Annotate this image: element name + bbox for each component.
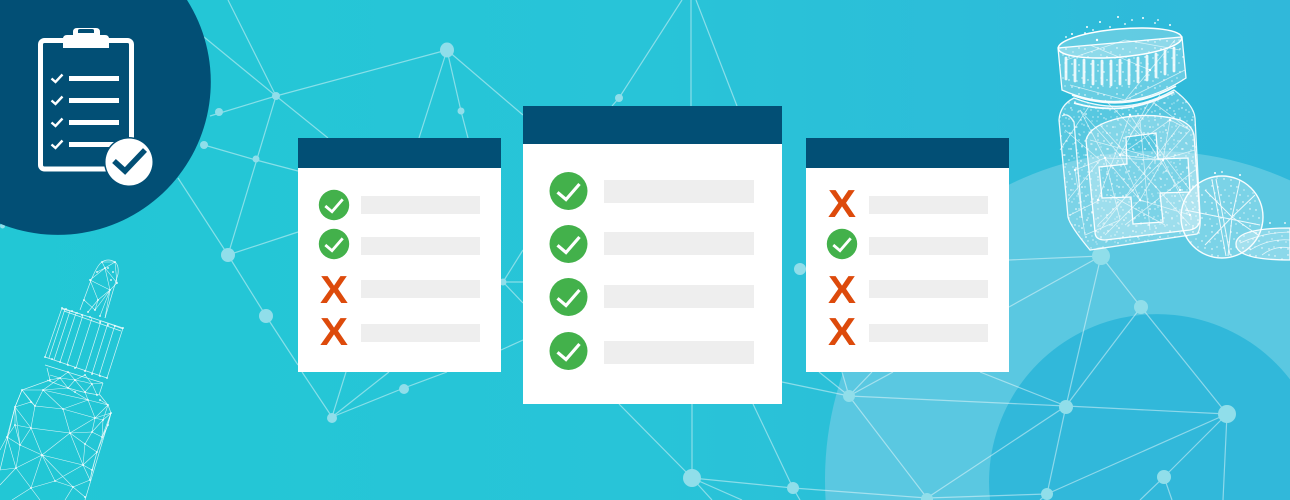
cap ribs bbox=[1066, 48, 1174, 85]
bottle body bbox=[1059, 90, 1200, 250]
sparkle dots above cap bbox=[1065, 16, 1286, 224]
centre panel green checks bbox=[550, 172, 588, 370]
side highlight bbox=[1062, 115, 1082, 218]
clipboard board bbox=[40, 40, 132, 169]
right panel green check bbox=[827, 229, 857, 259]
left panel green checks bbox=[319, 190, 349, 259]
right panel red crosses: X bbox=[828, 311, 856, 354]
check badge bbox=[104, 137, 154, 187]
panel: left checklist bbox=[298, 138, 501, 372]
right panel header bbox=[806, 138, 1009, 168]
panel: right checklist bbox=[806, 138, 1009, 372]
icon: pill bottle wireframe bbox=[1057, 16, 1290, 260]
icon: clipboard checklist bbox=[40, 28, 154, 187]
right panel red crosses bbox=[828, 183, 856, 354]
checklist ticks bbox=[52, 74, 62, 148]
right panel red crosses: X bbox=[828, 183, 856, 226]
cap bbox=[1058, 37, 1186, 102]
dark circle badge bbox=[0, 0, 211, 235]
round pill bbox=[1181, 176, 1263, 258]
left panel placeholder bars bbox=[361, 196, 480, 342]
inner blue circle bbox=[989, 314, 1290, 500]
left panel red crosses: X bbox=[320, 269, 348, 312]
icon: dropper bottle wireframe bbox=[0, 260, 123, 500]
left panel red crosses bbox=[320, 269, 348, 354]
centre panel header bbox=[523, 106, 782, 144]
centre panel placeholder bars bbox=[604, 180, 754, 364]
clipboard clip bbox=[63, 28, 109, 48]
checklist lines bbox=[69, 76, 119, 147]
left panel red crosses: X bbox=[320, 311, 348, 354]
right panel red crosses: X bbox=[828, 269, 856, 312]
bottle label with cross bbox=[1086, 115, 1200, 240]
flat pill bbox=[1236, 228, 1290, 260]
collar bbox=[1072, 86, 1176, 108]
left panel header bbox=[298, 138, 501, 168]
large pale circle bbox=[825, 151, 1290, 500]
panel: centre checklist bbox=[523, 106, 782, 404]
mesh bbox=[1060, 40, 1195, 235]
right panel placeholder bars bbox=[869, 196, 988, 342]
